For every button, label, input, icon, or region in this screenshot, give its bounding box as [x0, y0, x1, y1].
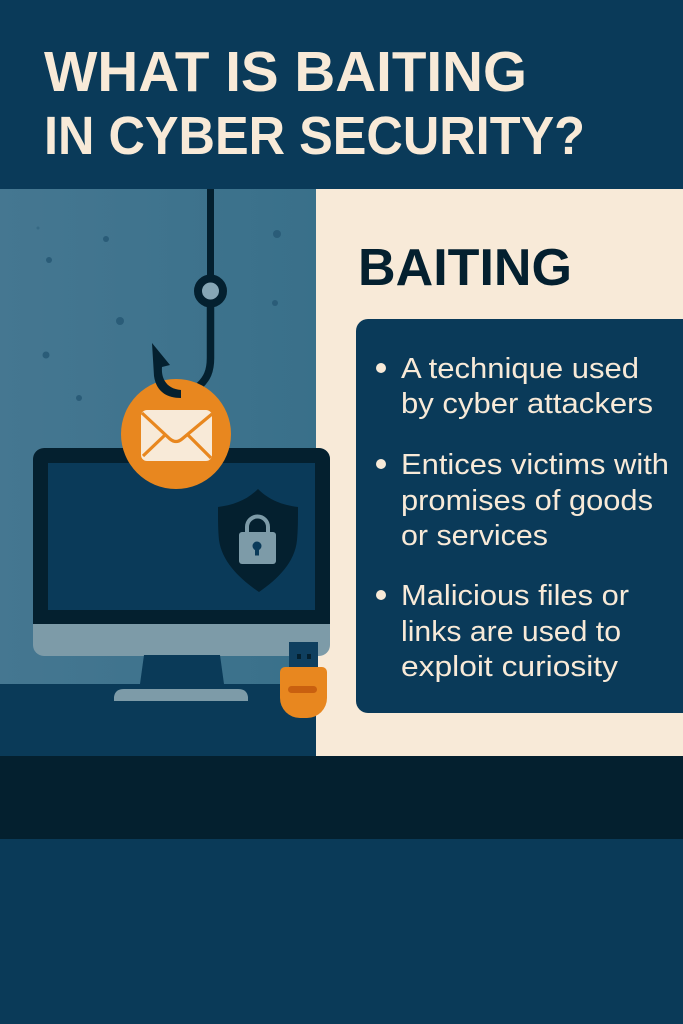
- background specks: [36, 226, 281, 401]
- icon: hook barb: [152, 343, 181, 398]
- icon: shield with padlock: [218, 489, 298, 592]
- dark footer band: [0, 756, 683, 839]
- bullet 1: [376, 353, 653, 420]
- title: IN CYBER SECURITY?: [44, 106, 585, 166]
- icon: monitor: [33, 448, 330, 701]
- icon: email bait: [121, 343, 231, 489]
- panel: illustration: [0, 189, 330, 756]
- bullet 3: links are used to: [401, 616, 621, 648]
- icon: USB drive: [280, 642, 327, 718]
- panel: bullet list: [356, 319, 683, 713]
- bullet 2: promises of goods: [401, 485, 653, 517]
- bullet 2: Entices victims with: [401, 449, 669, 481]
- desk: [0, 684, 316, 756]
- bullet 1: by cyber attackers: [401, 388, 653, 420]
- header band: [0, 0, 683, 189]
- icon: envelope: [141, 410, 212, 461]
- bullet 2: [376, 449, 669, 552]
- bottom band: [0, 839, 683, 1024]
- panel: definition background: [316, 189, 683, 756]
- bullet 3: [376, 580, 629, 683]
- icon: fishing line and hook: [198, 189, 223, 386]
- bullet 3: Malicious files or: [401, 580, 629, 612]
- bullet 1: A technique used: [401, 353, 639, 385]
- heading: Baiting: BAITING: [358, 239, 572, 297]
- title: [44, 40, 585, 166]
- title: WHAT IS BAITING: [44, 40, 527, 104]
- bullet 3: exploit curiosity: [401, 651, 619, 683]
- bullet 2: or services: [401, 520, 548, 552]
